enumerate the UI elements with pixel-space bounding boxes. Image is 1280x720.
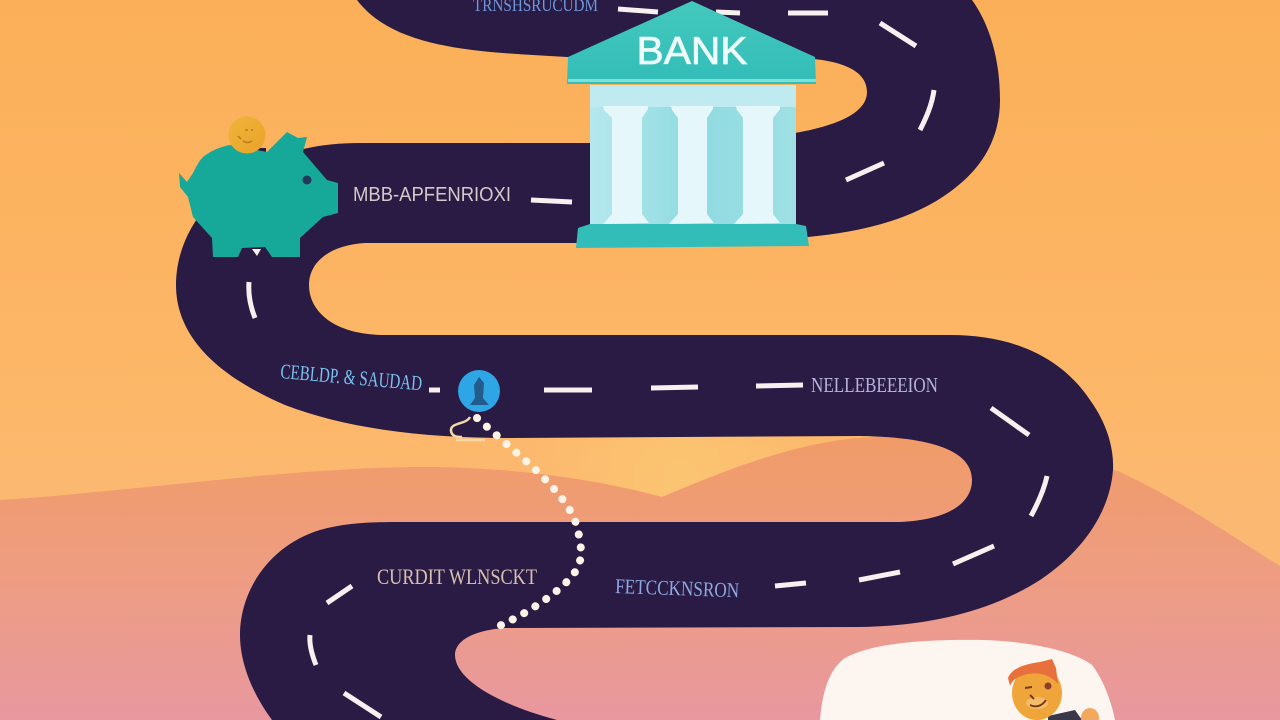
bank frieze: [590, 85, 796, 107]
label: lower right road: FETCCKNSRON: [615, 574, 740, 602]
white cloud panel: [820, 640, 1115, 720]
character: [1008, 659, 1099, 720]
road dash under pig: [252, 249, 261, 256]
bank sign: BANK: [636, 30, 748, 73]
face features: [1025, 687, 1046, 706]
label: lower left road: CURDIT WLNSCKT: [377, 564, 537, 589]
label: middle right road: NELLEBEEEION: [811, 373, 938, 397]
slot shadow: [228, 148, 266, 156]
piggy eye: [302, 176, 312, 184]
column middle: [669, 106, 714, 224]
bank body: [590, 85, 796, 226]
head: [1012, 666, 1062, 720]
right eye: [1044, 682, 1052, 690]
icon: blue location pin: [458, 370, 500, 412]
icon: piggy bank: [179, 116, 338, 257]
dotted route: [477, 418, 581, 627]
road centre dashes: [249, 9, 1047, 717]
hair: [1008, 659, 1058, 686]
icon: bank building: [567, 1, 816, 248]
label: middle left road: CEBLDP. & SAUDAD: [280, 359, 423, 395]
winding road: [176, 0, 1113, 720]
hook squiggle: [451, 417, 485, 440]
hills: [0, 437, 1280, 720]
coin face: [238, 130, 253, 142]
piggy body: [179, 132, 338, 257]
sun glow: [500, 400, 860, 510]
label: upper road: MBB-APFENRIOXI: [353, 184, 511, 206]
coin: [228, 116, 266, 154]
bank base: [576, 224, 809, 248]
pin glyph: [470, 377, 489, 405]
bank roof: [567, 1, 816, 84]
shirt: [1048, 710, 1082, 720]
column left: [603, 106, 649, 224]
roof trim: [568, 79, 816, 82]
column right: [734, 106, 780, 224]
muzzle: [1026, 697, 1048, 709]
raised hand: [1081, 708, 1099, 720]
